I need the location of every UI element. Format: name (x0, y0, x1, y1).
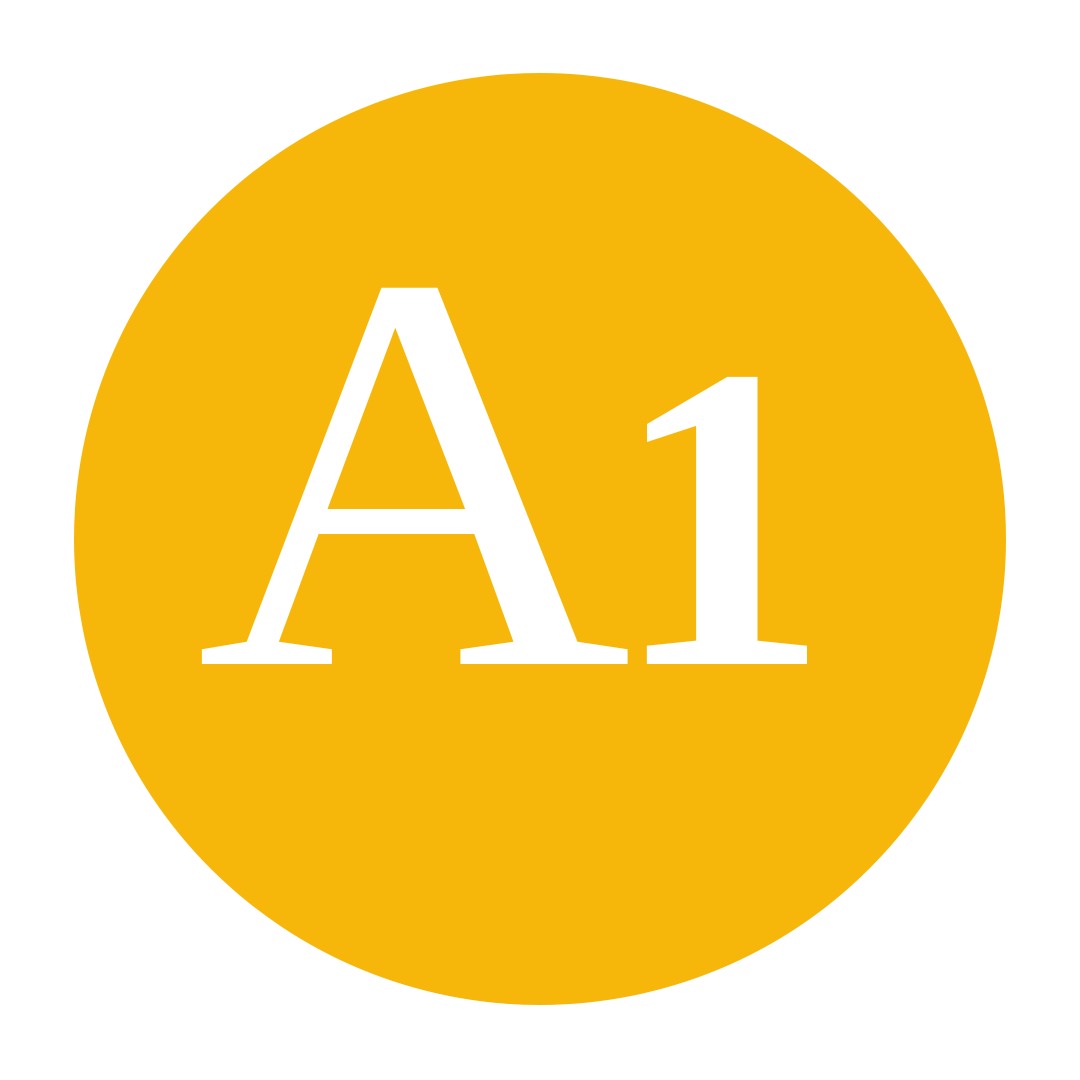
digit 1: 1 (612, 277, 830, 759)
yellow circle (74, 73, 1006, 1005)
letter A: A (196, 157, 632, 788)
logo badge: yellow circle with A1 (74, 73, 1006, 1005)
